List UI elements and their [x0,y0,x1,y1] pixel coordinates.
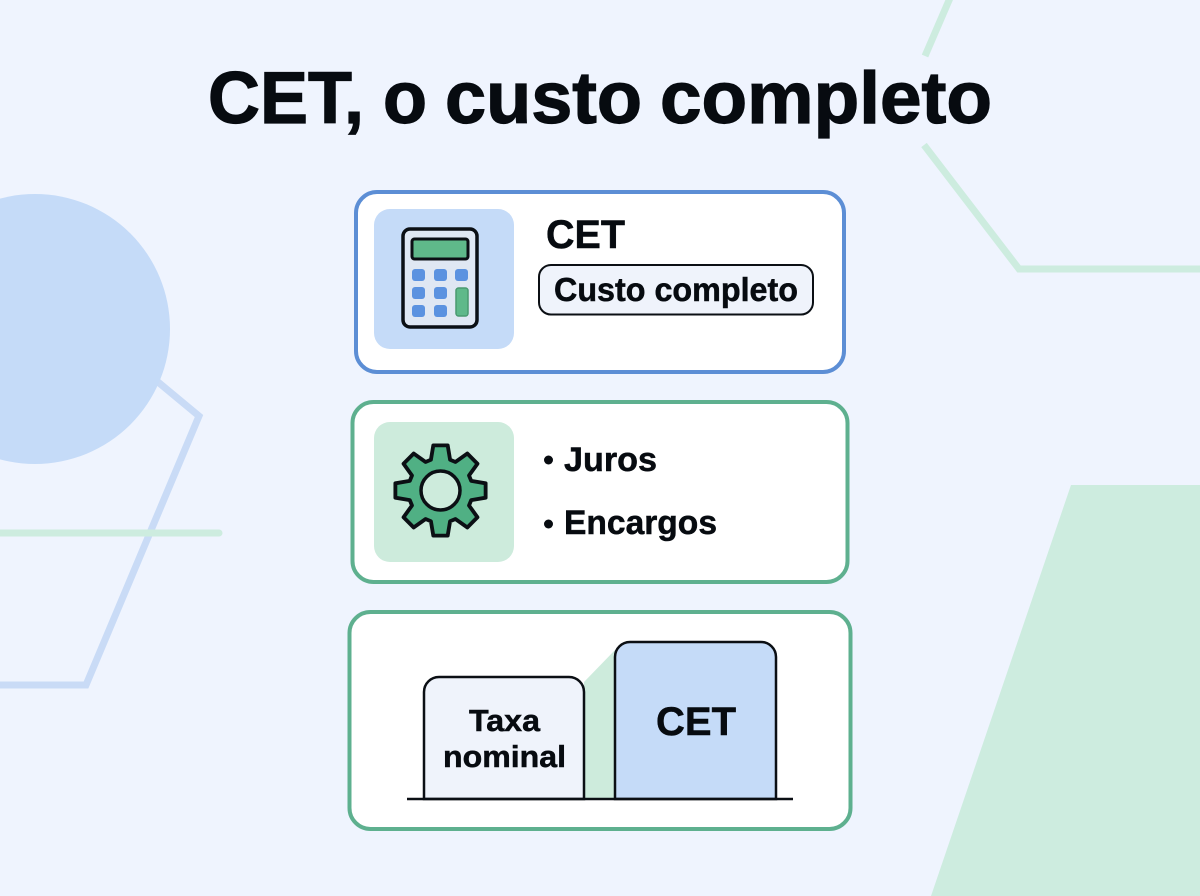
bar: CET: CET [656,700,736,744]
connector wedge [584,649,616,798]
badge: Custo completo: Custo completo [554,271,798,308]
title: o [383,58,427,139]
panel: comparison chart [350,612,850,829]
list item: Encargos: Encargos [564,504,717,542]
bar: Taxa nominal: Taxa [469,703,541,738]
panel: Juros e Encargos [352,402,848,582]
icon: calculator [374,209,514,349]
icon: gear [374,422,514,562]
chart baseline [407,798,793,800]
title [208,58,992,139]
list item: Juros: Juros [564,441,657,479]
bar: Taxa nominal [424,677,584,799]
panel: CET custo completo [356,192,844,372]
title: completo [660,58,992,139]
bar: Taxa nominal: nominal [443,739,566,774]
badge: Custo completo [539,265,813,314]
title: custo [445,58,642,139]
heading: CET: CET [546,213,625,257]
bar: CET [615,642,776,799]
title: CET, [208,58,364,139]
